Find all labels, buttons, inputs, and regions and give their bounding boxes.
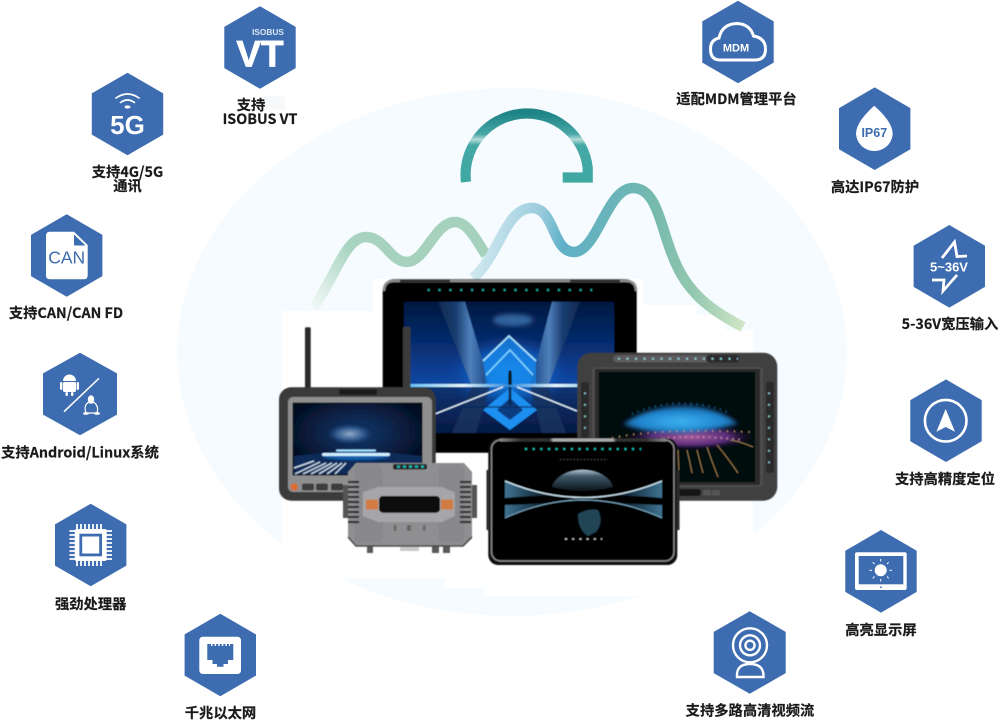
mounting ears [343,485,351,518]
icon: ISOBUS logo: VT [236,34,284,74]
feature: wide voltage [902,225,998,334]
background pale ellipse [177,88,847,616]
icon: compass [925,400,966,442]
floor rays [295,462,320,474]
wave lines [313,188,743,327]
label: 强劲处理器 [55,593,127,614]
feature: ISOBUS VT [223,6,297,129]
icon: webcam [733,628,767,677]
chevrons [483,336,536,384]
feature: HD video stream [686,611,814,720]
icon: chip [70,524,112,566]
device: front tablet [486,438,680,565]
left cooling fins [348,481,359,483]
right wave [473,188,743,327]
device: large tablet [383,279,637,453]
icon: CAN document: CAN [48,247,85,267]
feature: MDM [676,1,797,109]
label: 5-36V宽压输入 [902,313,998,334]
icon: android, slash, penguin [60,374,100,415]
pale patch [263,96,285,110]
label: 适配MDM管理平台 [676,88,797,109]
icon: water drop: IP67 [861,126,887,140]
chip pins [76,524,78,566]
feature: positioning [895,379,995,489]
white product photo backing [282,279,753,596]
icon: voltage bolt: 5~36V [930,260,968,274]
moon [552,470,613,491]
product group [279,279,777,565]
label: 高亮显示屏 [845,619,917,640]
right beam [530,302,580,386]
antenna right [403,327,410,391]
device: right tablet [577,353,777,501]
label: 高达IP67防护 [831,176,919,197]
feature: processor [55,504,127,614]
feature: CAN [9,214,123,323]
icon: MDM cloud: MDM [723,42,749,54]
swoosh wings [505,481,583,498]
label: 支持4G/5G [92,161,163,182]
figure [508,373,512,385]
antenna left [305,327,311,391]
label: 支持多路高清视频流 [686,700,814,720]
horizon [404,384,614,387]
feature: IP67 [831,87,919,197]
icon: screen with sun [855,552,907,590]
right cooling fins [460,481,471,483]
icon: ISOBUS logo: ISOBUS [252,27,284,37]
device: gray box computer [343,463,477,553]
feature: gigabit ethernet [185,614,256,721]
feature: 4G/5G [92,73,163,196]
label: ISOBUS VT [223,108,297,129]
left wave [313,222,486,308]
label: 支持高精度定位 [895,468,995,489]
label: 支持Android/Linux系统 [1,442,159,462]
device: left tablet with antennas [279,327,436,501]
label: 支持 [237,94,265,115]
sun rays [880,559,882,562]
label: 通讯 [113,175,142,196]
teal arc [466,114,588,182]
particle art [612,403,754,477]
left beam [438,302,490,386]
feature: Android/Linux [1,353,159,462]
icon: wifi 5G: 5G [110,110,145,140]
connectors [367,545,450,553]
hand [578,510,601,536]
label: 支持CAN/CAN FD [9,302,123,323]
icon: RJ45 port [199,637,241,674]
feature: bright display [845,530,917,640]
